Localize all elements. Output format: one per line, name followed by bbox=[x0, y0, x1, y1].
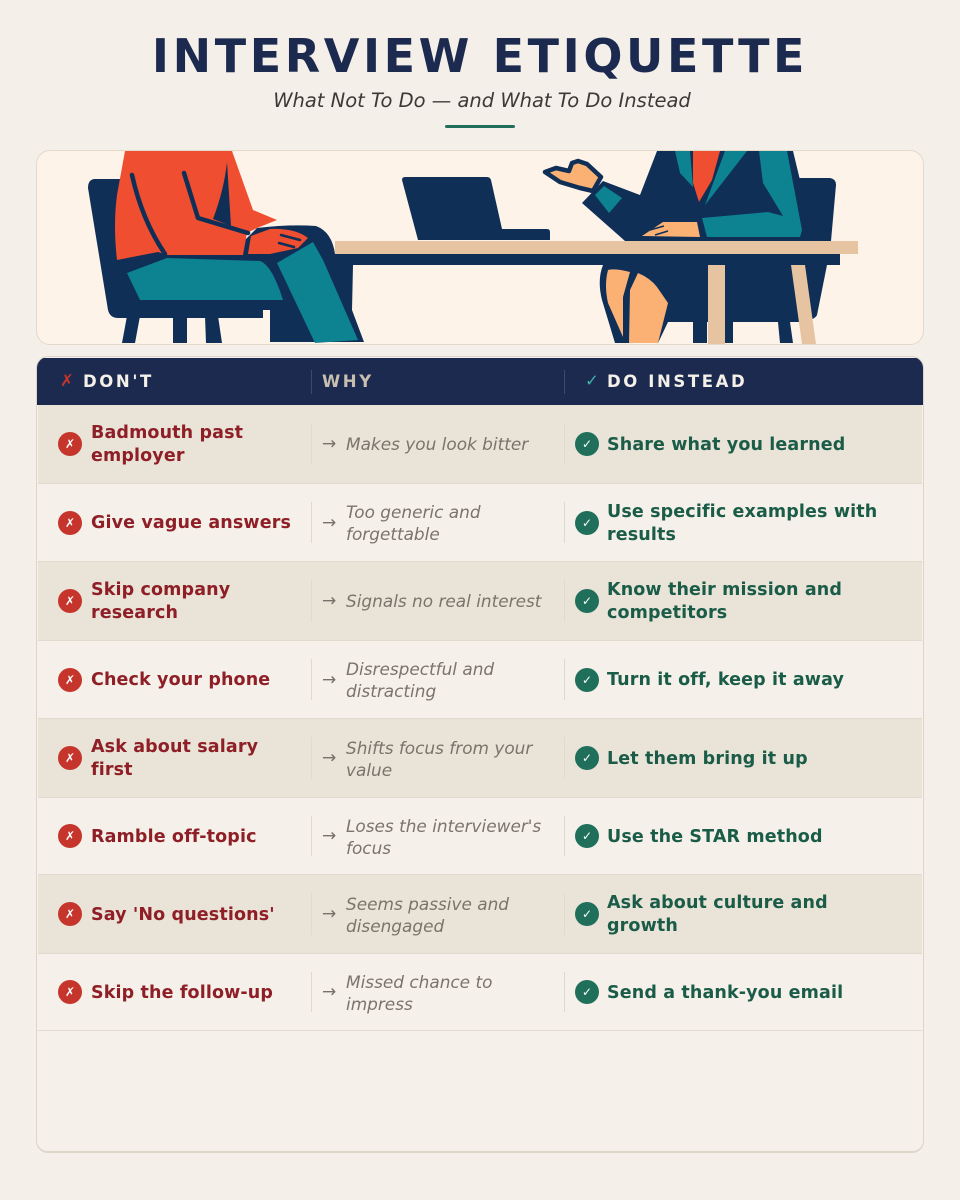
row 3: ✓ bbox=[582, 594, 592, 608]
icon: interviewer bbox=[545, 151, 836, 343]
row 6: ✗ bbox=[65, 829, 75, 843]
row 7: Seems passive and disengaged bbox=[346, 894, 509, 936]
row 7: ✓ bbox=[582, 907, 592, 921]
row 7 bbox=[38, 875, 922, 953]
icon: seated candidate bbox=[88, 151, 364, 343]
row 1: Badmouth past employer bbox=[91, 423, 243, 466]
accent rule bbox=[445, 125, 515, 128]
row 8: Missed chance to impress bbox=[346, 972, 492, 1014]
row 2: ✓ bbox=[582, 516, 592, 530]
row 5: ✗ bbox=[65, 751, 75, 765]
row 5: ✓ bbox=[582, 751, 592, 765]
row 8: Skip the follow-up bbox=[91, 982, 273, 1002]
icon: laptop bbox=[402, 177, 550, 240]
row 8 bbox=[38, 954, 922, 1030]
row 4: ✗ bbox=[65, 672, 75, 686]
table top and legs bbox=[335, 241, 858, 344]
row 6: Loses the interviewer's focus bbox=[346, 816, 541, 858]
row 6: → bbox=[322, 826, 336, 846]
row 1 bbox=[38, 405, 922, 483]
row 1: Share what you learned bbox=[607, 434, 845, 454]
row 4: Turn it off, keep it away bbox=[607, 670, 844, 690]
row 1: ✗ bbox=[65, 437, 75, 451]
row 6: Use the STAR method bbox=[607, 826, 823, 846]
row 2: → bbox=[322, 512, 336, 532]
table underside bbox=[335, 254, 840, 265]
table header: DON'T bbox=[83, 372, 154, 391]
table header: ✗ bbox=[60, 371, 76, 390]
row 4 bbox=[38, 641, 922, 718]
row 5: Shifts focus from your value bbox=[346, 738, 532, 780]
table header bbox=[37, 358, 923, 405]
row 7: ✗ bbox=[65, 907, 75, 921]
row 6: ✓ bbox=[582, 829, 592, 843]
row 8: → bbox=[322, 982, 336, 1002]
row 5 bbox=[38, 719, 922, 797]
row 4: ✓ bbox=[582, 672, 592, 686]
row 5: Let them bring it up bbox=[607, 748, 808, 768]
row 2: Use specific examples with results bbox=[607, 502, 877, 544]
row 3: Signals no real interest bbox=[346, 591, 541, 611]
row 1: → bbox=[322, 434, 336, 454]
row 1: ✓ bbox=[582, 437, 592, 451]
title: INTERVIEW ETIQUETTE bbox=[152, 29, 808, 83]
row 8: ✗ bbox=[65, 985, 75, 999]
row 4: Disrespectful and distracting bbox=[346, 659, 494, 701]
row 7: Ask about culture and growth bbox=[607, 893, 828, 936]
table header: DO INSTEAD bbox=[607, 372, 747, 391]
row 6: Ramble off-topic bbox=[91, 826, 257, 846]
panel: comparison table bbox=[36, 356, 924, 1153]
row 4: Check your phone bbox=[91, 670, 270, 690]
row 5: → bbox=[322, 748, 336, 768]
row 8: Send a thank-you email bbox=[607, 982, 843, 1002]
row 3 bbox=[38, 562, 922, 640]
subtitle: What Not To Do — and What To Do Instead bbox=[273, 89, 691, 112]
row 2: ✗ bbox=[65, 516, 75, 530]
row 3: Skip company research bbox=[91, 580, 230, 623]
table header: WHY bbox=[322, 372, 374, 391]
row 3: → bbox=[322, 591, 336, 611]
row 2: Give vague answers bbox=[91, 513, 291, 533]
row 6 bbox=[38, 798, 922, 874]
row 3: ✗ bbox=[65, 594, 75, 608]
row 2 bbox=[38, 484, 922, 561]
row 5: Ask about salary first bbox=[91, 737, 258, 780]
panel: illustration bbox=[36, 150, 924, 345]
row 7: Say 'No questions' bbox=[91, 904, 275, 924]
row 7: → bbox=[322, 904, 336, 924]
row 3: Know their mission and competitors bbox=[607, 580, 842, 623]
row 4: → bbox=[322, 670, 336, 690]
row 8: ✓ bbox=[582, 985, 592, 999]
table header: ✓ bbox=[585, 371, 601, 390]
row 2: Too generic and forgettable bbox=[346, 502, 481, 544]
row 1: Makes you look bitter bbox=[346, 434, 528, 454]
